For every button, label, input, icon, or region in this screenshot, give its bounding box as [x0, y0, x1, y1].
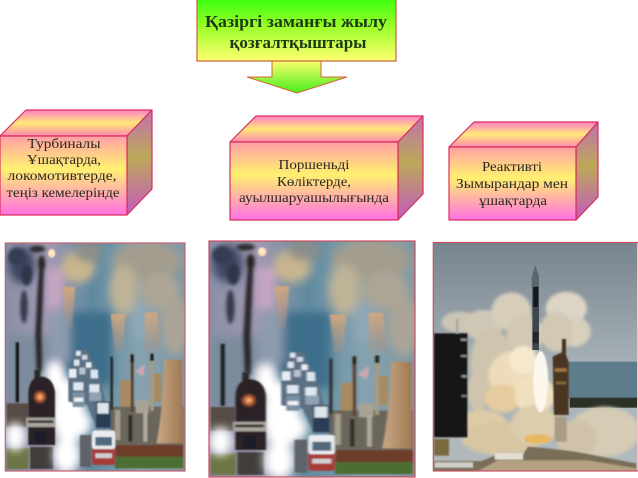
box: jet engines	[449, 122, 598, 220]
box: jet engines: Реактивті	[482, 160, 542, 175]
box: piston engines: ауылшаруашылығында	[239, 191, 390, 206]
box: turbine engines: Ұшақтарда,	[27, 153, 101, 168]
title line 2: қозғалтқыштары	[230, 33, 366, 52]
title box	[197, 0, 396, 61]
box: turbine engines: Турбиналы	[28, 137, 101, 152]
box: jet engines: Зымырандар мен	[456, 177, 569, 192]
box: turbine engines	[0, 110, 152, 215]
box: turbine engines: локомотивтерде,	[8, 169, 116, 184]
photo: rocket launch	[433, 242, 638, 471]
box: piston engines	[230, 116, 423, 220]
box: turbine engines: теңіз кемелерінде	[6, 186, 120, 201]
photo: steam train, traffic and power plant (second copy)	[209, 239, 419, 478]
box: piston engines: Поршеньді	[278, 158, 350, 173]
photo: steam train, traffic and power plant	[5, 241, 189, 473]
title banner with down arrow	[197, 0, 396, 93]
title arrow body	[247, 61, 347, 93]
box: piston engines: Көліктерде,	[277, 175, 351, 190]
box: jet engines: ұшақтарда	[479, 194, 548, 209]
title line 1: Қазіргі заманғы жылу	[205, 12, 388, 31]
